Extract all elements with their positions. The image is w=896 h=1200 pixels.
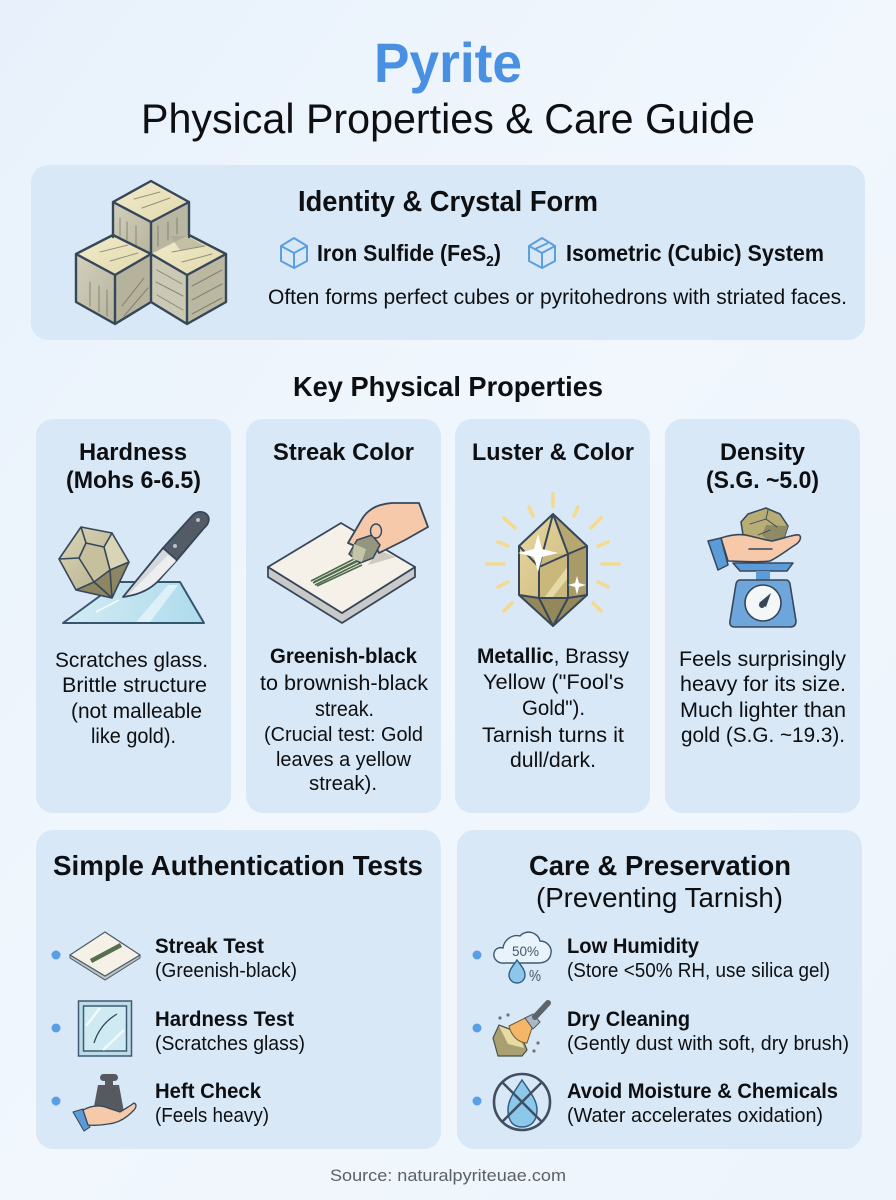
heading: density: Density bbox=[720, 439, 806, 466]
heading: identity: Identity & Crystal Form bbox=[298, 186, 598, 218]
icon: crystal, knife and glass bbox=[59, 512, 209, 623]
panel: identity and crystal form bbox=[31, 165, 865, 340]
text: hardness description: Scratches glass. bbox=[55, 649, 208, 672]
source line: Source: naturalpyriteuae.com bbox=[330, 1166, 566, 1185]
test: streak: Streak Test bbox=[155, 935, 264, 958]
text: luster description: Yellow ("Fool's bbox=[483, 671, 624, 694]
text: hardness description bbox=[55, 649, 208, 748]
text: streak description: (Crucial test: Gold bbox=[264, 724, 423, 746]
care: dry cleaning: (Gently dust with soft, dry brush) bbox=[567, 1033, 849, 1055]
text: hardness description: (not malleable bbox=[71, 700, 202, 723]
panel: hardness bbox=[36, 419, 231, 813]
text: streak description: streak. bbox=[315, 698, 374, 721]
heading: luster and color: Luster & Color bbox=[472, 439, 634, 466]
care: dry cleaning bbox=[472, 1003, 849, 1056]
care: low humidity: % bbox=[529, 968, 541, 985]
icon: shining crystal bbox=[487, 494, 619, 626]
care: dry cleaning: Dry Cleaning bbox=[567, 1008, 690, 1031]
test: hardness: Hardness Test bbox=[155, 1008, 294, 1031]
text: streak description: leaves a yellow bbox=[276, 749, 412, 771]
text: streak description: Greenish-black bbox=[270, 645, 417, 668]
care: avoid moisture: Avoid Moisture & Chemicals bbox=[567, 1080, 838, 1103]
icon: streak plate and hand bbox=[268, 503, 428, 623]
heading: density: (S.G. ~5.0) bbox=[706, 467, 819, 494]
test: heft bbox=[52, 1074, 269, 1131]
description: Often forms perfect cubes or pyritohedrons with striated faces. bbox=[268, 286, 847, 309]
care: low humidity bbox=[472, 932, 830, 985]
label: crystal system: Isometric (Cubic) System bbox=[566, 240, 824, 266]
icon: hand, rock and scale bbox=[708, 508, 800, 627]
panel: luster and color bbox=[455, 419, 650, 813]
text: density description: heavy for its size. bbox=[680, 673, 846, 696]
text: density description: Feels surprisingly bbox=[679, 648, 847, 671]
subtitle: Physical Properties & Care Guide bbox=[141, 95, 755, 142]
care: low humidity: Low Humidity bbox=[567, 935, 699, 958]
heading: density bbox=[706, 439, 819, 494]
label: iron sulfide: Iron Sulfide (FeS bbox=[317, 240, 500, 266]
test: streak bbox=[52, 932, 297, 982]
heading: streak color: Streak Color bbox=[273, 439, 414, 466]
heading: authentication tests: Simple Authentication Tests bbox=[53, 850, 423, 881]
text: density description: gold (S.G. ~19.3). bbox=[681, 724, 845, 747]
text: streak description: streak). bbox=[309, 773, 377, 795]
test: hardness bbox=[52, 1001, 305, 1056]
text: luster description bbox=[477, 645, 629, 772]
text: luster description: dull/dark. bbox=[510, 749, 596, 772]
text: streak description: to brownish-black bbox=[260, 672, 429, 695]
heading: hardness: (Mohs 6-6.5) bbox=[66, 467, 201, 494]
test: heft: (Feels heavy) bbox=[155, 1105, 269, 1127]
panel: density bbox=[665, 419, 860, 813]
care: low humidity: 50% bbox=[512, 943, 539, 959]
section heading: Key Physical Properties bbox=[293, 371, 603, 402]
label: iron sulfide: ) bbox=[494, 240, 501, 266]
test: streak: (Greenish-black) bbox=[155, 960, 297, 982]
icon: pyrite cubes bbox=[76, 181, 226, 324]
icon: small cube outline bbox=[529, 238, 555, 268]
icon: small cube bbox=[281, 238, 307, 268]
heading: hardness: Hardness bbox=[79, 439, 187, 466]
care: avoid moisture: (Water accelerates oxidation) bbox=[567, 1105, 823, 1127]
heading: hardness bbox=[66, 439, 201, 494]
label: iron sulfide: 2 bbox=[486, 253, 494, 270]
test: hardness: (Scratches glass) bbox=[155, 1033, 305, 1055]
text: luster description: Metallic, Brassy bbox=[477, 645, 629, 668]
text: luster description: Gold"). bbox=[522, 697, 585, 720]
care: low humidity: (Store <50% RH, use silica gel) bbox=[567, 960, 830, 982]
text: hardness description: like gold). bbox=[91, 725, 176, 748]
panel: care and preservation bbox=[457, 830, 862, 1149]
title: Pyrite bbox=[374, 31, 522, 94]
heading: care and preservation: (Preventing Tarnish) bbox=[536, 882, 783, 913]
panel: streak color bbox=[246, 419, 441, 813]
text: density description bbox=[679, 648, 847, 747]
text: hardness description: Brittle structure bbox=[62, 674, 207, 697]
text: luster description: Tarnish turns it bbox=[482, 724, 624, 747]
care: avoid moisture bbox=[472, 1074, 838, 1130]
panel: simple authentication tests bbox=[36, 830, 441, 1149]
test: heft: Heft Check bbox=[155, 1080, 261, 1103]
text: streak description bbox=[260, 645, 429, 795]
text: density description: Much lighter than bbox=[680, 699, 846, 722]
heading: care and preservation bbox=[529, 850, 791, 913]
heading: care and preservation: Care & Preservation bbox=[529, 850, 791, 881]
